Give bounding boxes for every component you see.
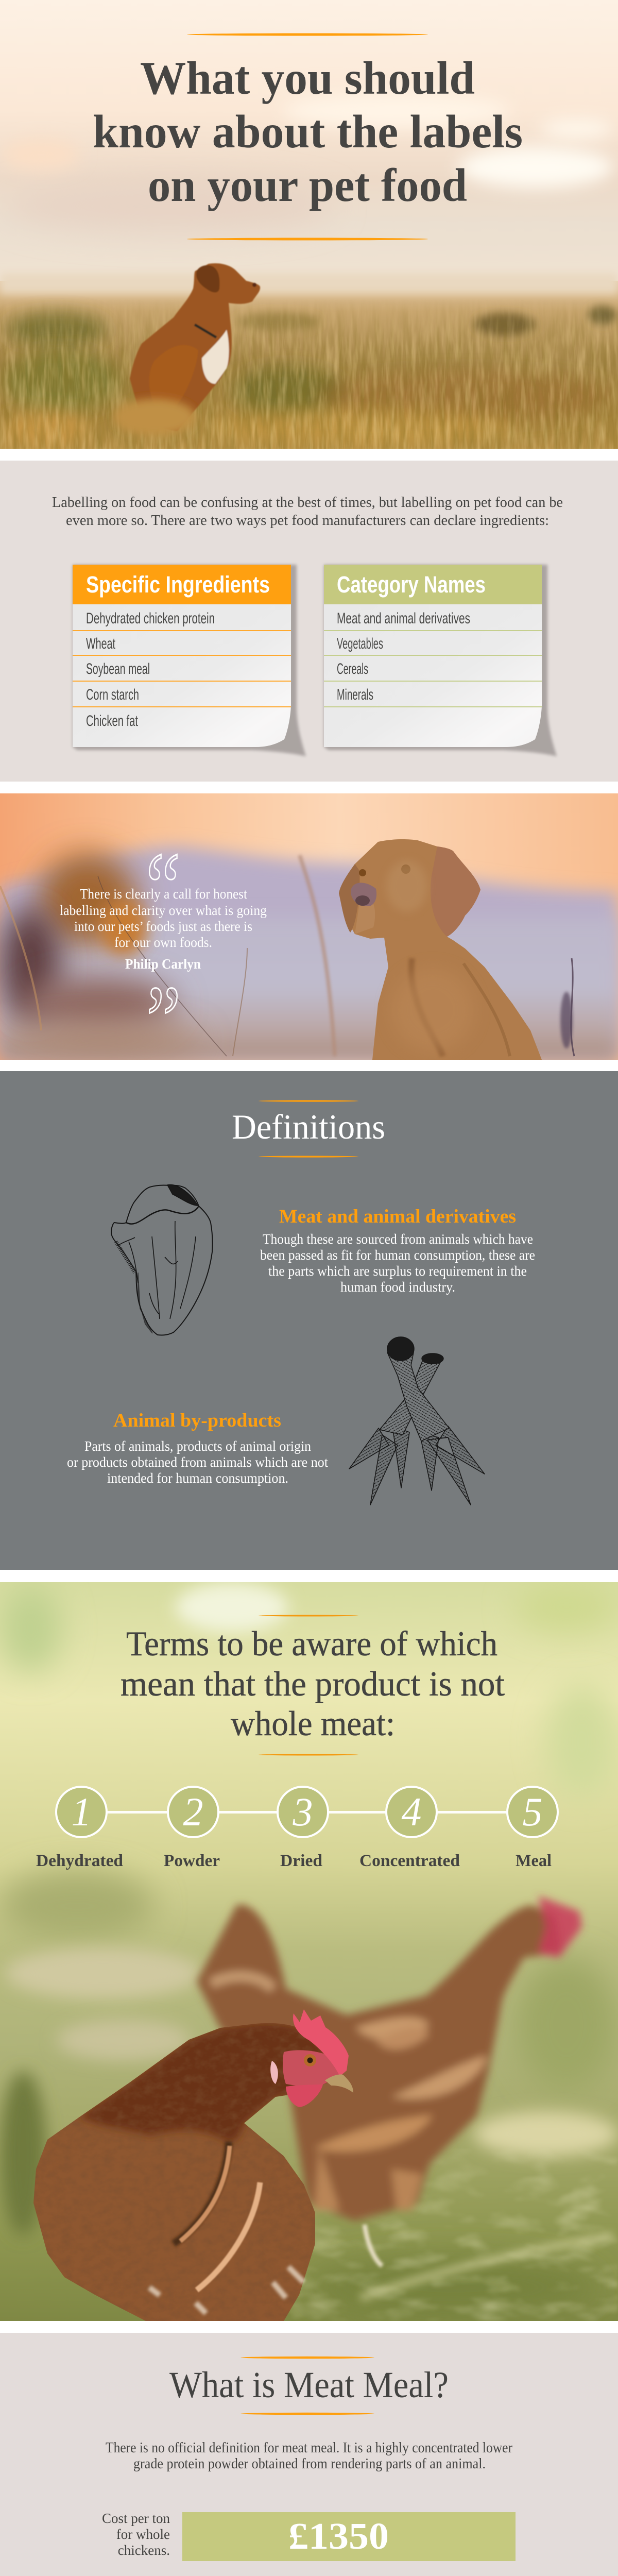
heading and text: meat and animal derivatives: been passed as fit for human consumption, these are (260, 1247, 535, 1263)
step 3: dried: Dried (280, 1852, 322, 1870)
heading and text: animal by-products (67, 1410, 328, 1486)
bar: whole chickens cost: Cost per ton (102, 2511, 170, 2526)
bar: whole chickens cost: for whole (116, 2527, 170, 2542)
heading: what is meat meal (169, 2357, 449, 2415)
quote: Philip Carlyn: Philip Carlyn (125, 956, 201, 972)
heading: what is meat meal: What is Meat Meal? (169, 2364, 449, 2405)
step 2: powder (164, 1787, 220, 1870)
title block: What you should (140, 52, 475, 104)
bar: whole chickens cost: £1350 (288, 2515, 389, 2557)
quote: Philip Carlyn: for our own foods. (114, 935, 212, 950)
heading and text: animal by-products: Parts of animals, products of animal origin (84, 1438, 311, 1454)
step 5: meal: 5 (522, 1789, 543, 1834)
heading and text: meat and animal derivatives: Meat and animal derivatives (279, 1206, 516, 1227)
heading: terms to be aware of: mean that the product is not (121, 1664, 505, 1703)
heading and text: meat and animal derivatives: the parts which are surplus to requirement in the (268, 1263, 527, 1279)
quote: Philip Carlyn: labelling and clarity over what is going (60, 903, 267, 918)
step 2: powder: 2 (183, 1789, 203, 1834)
step 1: dehydrated: Dehydrated (36, 1852, 123, 1870)
quote: Philip Carlyn: ” (146, 967, 181, 1075)
quote: Philip Carlyn: “ (146, 833, 180, 941)
step 1: dehydrated (36, 1787, 123, 1870)
heading: terms to be aware of: Terms to be aware of which (126, 1624, 497, 1663)
table: category names: Vegetables (337, 635, 383, 652)
step 5: meal (507, 1787, 558, 1870)
step 1: dehydrated: 1 (71, 1789, 92, 1834)
table: specific ingredients: Dehydrated chicken protein (86, 610, 215, 627)
quote photo: vizsla dog (0, 793, 618, 1060)
heading: definitions (232, 1100, 385, 1158)
table: category names: Cereals (337, 660, 368, 677)
hero photo: dog in field (0, 0, 618, 449)
intro text: even more so. There are two ways pet food manufacturers can declare ingredients: (66, 512, 549, 529)
quote: Philip Carlyn: There is clearly a call for honest (80, 886, 247, 902)
title block: know about the labels (93, 106, 523, 158)
hen: foreground (31, 2009, 353, 2321)
timeline: five terms (36, 1787, 558, 1870)
step 5: meal: Meal (516, 1852, 552, 1870)
table: category names: Category Names (337, 571, 486, 598)
bar: whole chickens cost: chickens. (118, 2543, 170, 2558)
panel: intro and ingredient tables (0, 461, 618, 782)
panel: definitions (0, 1071, 618, 1570)
step 2: powder: Powder (164, 1852, 220, 1870)
table: specific ingredients (73, 565, 306, 756)
text: meat meal definition (106, 2440, 513, 2472)
title block: on your pet food (148, 159, 467, 211)
heading and text: meat and animal derivatives: Though these are sourced from animals which have (263, 1231, 533, 1247)
table: specific ingredients: Wheat (86, 635, 115, 652)
intro text (52, 494, 563, 529)
heading and text: animal by-products: Animal by-products (113, 1410, 281, 1431)
text: meat meal definition: There is no official definition for meat meal. It is a highly concentrated lower (106, 2440, 513, 2456)
table: specific ingredients: Corn starch (86, 686, 139, 703)
hen: blurred background (197, 1896, 582, 2221)
intro text: Labelling on food can be confusing at the best of times, but labelling on pet food can be (52, 494, 563, 511)
panel: what is meat meal (0, 2333, 618, 2576)
text: meat meal definition: grade protein powder obtained from rendering parts of an animal. (133, 2456, 486, 2472)
table: category names (324, 565, 557, 756)
heading: terms to be aware of: whole meat: (231, 1704, 395, 1743)
heading and text: animal by-products: or products obtained from animals which are not (67, 1454, 328, 1470)
table: specific ingredients: Chicken fat (86, 713, 138, 730)
bar: whole chickens cost (102, 2511, 516, 2561)
table: category names: Meat and animal derivatives (337, 610, 470, 627)
step 4: concentrated: 4 (402, 1789, 421, 1834)
quote: Philip Carlyn: into our pets’ foods just as there is (74, 919, 252, 934)
table: specific ingredients: Soybean meal (86, 660, 150, 677)
step 4: concentrated (359, 1787, 460, 1870)
step 4: concentrated: Concentrated (359, 1852, 460, 1870)
icon: piece of meat (111, 1185, 213, 1335)
table: category names: Minerals (337, 686, 373, 703)
heading: definitions: Definitions (232, 1107, 385, 1146)
heading: terms to be aware of (121, 1615, 505, 1756)
photo: hens with terms heading (0, 1582, 618, 2321)
quote: Philip Carlyn (60, 833, 267, 1075)
heading and text: animal by-products: intended for human consumption. (107, 1470, 288, 1486)
table: specific ingredients: Specific Ingredients (86, 571, 270, 598)
step 3: dried (278, 1787, 328, 1870)
title block (93, 33, 523, 240)
icon: chicken feet (349, 1337, 485, 1505)
dog (113, 263, 260, 436)
heading and text: meat and animal derivatives: human food industry. (340, 1279, 455, 1295)
dog (339, 839, 542, 1060)
step 3: dried: 3 (293, 1789, 313, 1834)
heading and text: meat and animal derivatives (260, 1206, 535, 1295)
